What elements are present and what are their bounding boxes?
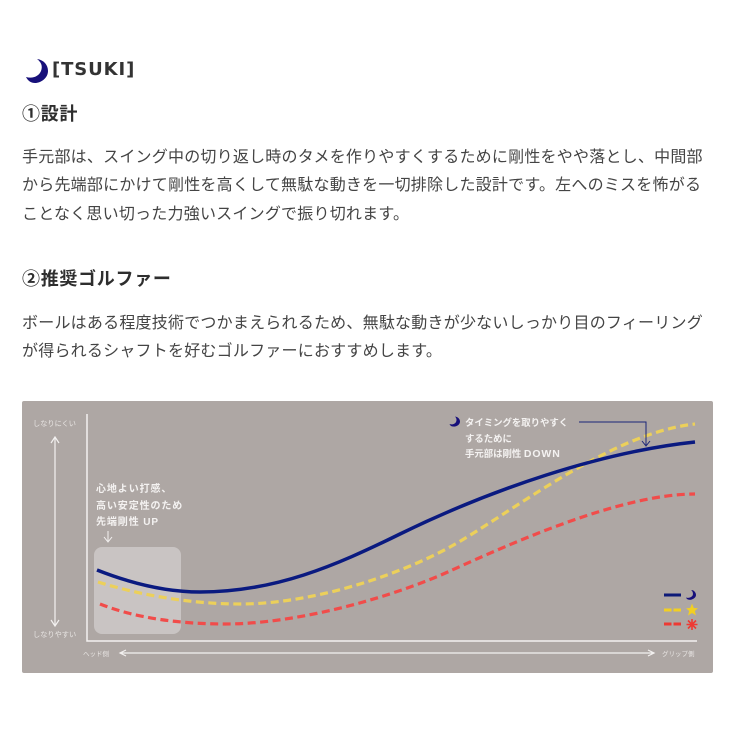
heading: recommended golfer: ②推奨ゴルファー <box>22 269 172 289</box>
callout: grip stiffness down: タイミングを取りやすく <box>465 417 568 428</box>
callout: grip stiffness down: するために <box>465 433 512 444</box>
callout: grip stiffness down <box>450 416 650 460</box>
text block: design: 手元部は、スイング中の切り返し時のタメを作りやすくするために剛性をやや落とし、中間部 <box>22 149 703 166</box>
curve: red star <box>100 494 695 624</box>
text block: recommended golfer: ボールはある程度技術でつかまえられるため、無駄な動きが少ないしっかり目のフィーリング <box>22 315 703 332</box>
label: grip side: グリップ側 <box>662 649 695 658</box>
heading: design: ①設計 <box>22 104 78 124</box>
title: [TSUKI] <box>52 59 135 80</box>
callout: tip stiffness up: 高い安定性のため <box>96 499 183 512</box>
label: flexible: しなりやすい <box>33 630 76 639</box>
icon: crescent moon <box>26 59 48 83</box>
text block: design: から先端部にかけて剛性を高くして無駄な動きを一切排除した設計です。左へのミスを怖がる <box>22 177 701 194</box>
horizontal arrow: head to grip <box>120 650 654 656</box>
text block: recommended golfer: が得られるシャフトを好むゴルファーにおすすめします。 <box>22 343 442 360</box>
highlight box: tip section <box>94 547 181 634</box>
legend <box>664 590 698 630</box>
label: head side: ヘッド側 <box>83 650 110 658</box>
callout: tip stiffness up: 先端剛性 UP <box>96 515 159 528</box>
curve: yellow star <box>98 424 695 604</box>
text block: design: ことなく思い切った力強いスイングで振り切れます。 <box>22 206 409 223</box>
callout: tip stiffness up <box>96 482 183 542</box>
text block: recommended golfer <box>22 314 703 360</box>
chart background panel <box>22 401 713 673</box>
label: stiff: しなりにくい <box>33 419 76 428</box>
curve: navy moon <box>97 442 695 592</box>
callout: grip stiffness down: 手元部は剛性 DOWN <box>465 448 561 460</box>
callout: tip stiffness up: 心地よい打感、 <box>96 482 172 495</box>
text block: design <box>22 148 703 223</box>
vertical arrow: stiffness <box>51 437 59 626</box>
chart axes <box>87 414 697 641</box>
